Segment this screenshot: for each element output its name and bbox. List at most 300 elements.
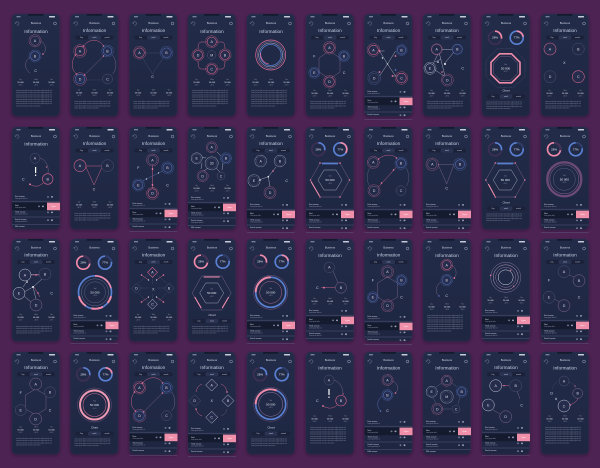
- diamond chart: D: [193, 399, 196, 403]
- concentric ring chart: [490, 262, 521, 292]
- stats: Year: [461, 90, 464, 92]
- list: [247, 314, 295, 344]
- node chart: F: [137, 166, 140, 170]
- tabs: [134, 148, 172, 152]
- list: Fourth season: [309, 332, 320, 335]
- hexagon node chart: C: [343, 71, 346, 75]
- node chart: C: [165, 414, 168, 418]
- stats: Day: [430, 304, 433, 306]
- ring chart: 50 000: [560, 177, 569, 181]
- stats: 50 000: [283, 82, 291, 84]
- phone: row 3 screen 4: [188, 239, 236, 342]
- stats: +30 %: [445, 309, 450, 311]
- title: Information: [494, 253, 518, 258]
- tabs: Day: [139, 262, 142, 264]
- paragraph: Lorem ipsum dolor sit amet consectetur adipiscing elit sed: [16, 439, 52, 442]
- hexagon node chart: D: [34, 417, 37, 421]
- list: Fourth season: [368, 113, 379, 116]
- diamond chart: X: [210, 399, 213, 403]
- tabs: week: [93, 37, 97, 39]
- phone: row 1 screen 10: [541, 14, 589, 117]
- ring chart: [254, 387, 288, 421]
- list: Fourth season: [191, 450, 202, 453]
- hexagon node chart: [15, 378, 55, 425]
- hexagon chart: Total: [210, 288, 214, 290]
- title: Information: [553, 28, 577, 33]
- list: First season: [15, 195, 25, 198]
- stats: Week: [210, 185, 214, 187]
- ring chart: +30 %: [269, 295, 273, 297]
- paragraph: Lorem ipsum dolor sit amet consectetur adipiscing elit sed: [251, 102, 287, 105]
- ring chart: [78, 388, 112, 422]
- list: Fourth season: [132, 449, 144, 452]
- node chart: B: [340, 399, 343, 403]
- paragraph: Lorem ipsum dolor sit amet consectetur adipiscing elit sed: [310, 430, 346, 433]
- node chart: B: [106, 164, 109, 168]
- list: Lorem ipsum dolor sit: [15, 212, 28, 216]
- stats: +30 %: [50, 319, 54, 321]
- list: Open: [404, 326, 408, 328]
- phone: row 1 screen 7: [364, 14, 412, 120]
- tabs: week: [34, 262, 38, 264]
- stats: Day: [19, 314, 22, 316]
- list: First season: [74, 314, 83, 317]
- node chart: [544, 43, 584, 83]
- stats: +30 %: [34, 84, 39, 86]
- list: First season: [309, 203, 319, 206]
- list: Third season: [191, 212, 201, 214]
- node chart: B: [340, 286, 343, 290]
- stats: 50 000: [327, 93, 334, 95]
- list: [130, 426, 178, 456]
- stats: [311, 416, 350, 423]
- list: Third season: [250, 220, 260, 222]
- stats: 50 000: [577, 93, 585, 95]
- list: First season: [426, 420, 436, 423]
- node chart: A: [259, 159, 262, 163]
- tabs: month: [46, 261, 51, 264]
- stats: +30 %: [313, 303, 317, 305]
- list: Fourth season: [250, 337, 262, 340]
- stats: +30 %: [93, 207, 97, 209]
- network chart: B: [400, 48, 403, 52]
- tabs: week: [269, 433, 273, 435]
- phone: row 2 screen 1: [12, 127, 60, 230]
- list: Third season: [426, 436, 436, 438]
- phone: row 4 screen 4: [188, 352, 236, 456]
- stats: Week: [93, 202, 96, 204]
- stats: 50 000: [311, 93, 319, 95]
- donut 28 percent: 28%: [257, 372, 263, 376]
- paragraph: Lorem ipsum dolor sit amet consectetur adipiscing elit sed: [192, 98, 228, 101]
- diamond chart: A: [210, 383, 213, 387]
- list: Fifth season: [426, 450, 436, 453]
- node chart: B: [577, 47, 580, 51]
- stats: Year: [344, 90, 347, 92]
- network chart: B: [456, 48, 459, 52]
- tabs: week: [152, 262, 156, 264]
- node chart: C: [445, 294, 448, 298]
- stats: Day: [137, 314, 140, 316]
- stats: +30 %: [313, 95, 317, 97]
- paragraph: Lorem ipsum dolor sit amet consectetur: [192, 332, 217, 335]
- list: Lorem ipsum dolor sit: [191, 444, 204, 448]
- paragraph: Lorem ipsum dolor sit amet consectetur adipiscing elit sed: [251, 93, 287, 96]
- paragraph: Lorem ipsum dolor sit amet consectetur adipiscing elit sed: [74, 102, 110, 105]
- phone: row 3 screen 9: [482, 239, 530, 342]
- stats: Year: [520, 297, 523, 299]
- stats: +30 %: [210, 84, 215, 86]
- hexagon node chart: D: [386, 304, 389, 308]
- node chart: C: [210, 67, 213, 71]
- heading: Business: [501, 359, 512, 362]
- node chart: A: [549, 47, 552, 51]
- paragraph: Lorem ipsum dolor sit amet consectetur adipiscing elit sed: [310, 104, 346, 107]
- tabs: month: [516, 207, 521, 210]
- diamond chart: [132, 267, 174, 309]
- stats: 50 000: [224, 188, 232, 190]
- list: [364, 203, 412, 232]
- title: Information: [377, 366, 401, 370]
- node chart: E: [253, 179, 256, 183]
- phone: row 4 screen 6: [306, 352, 354, 455]
- list: First season: [250, 203, 260, 206]
- node chart: [316, 375, 346, 408]
- paragraph: Lorem ipsum dolor sit amet consectetur: [74, 219, 99, 222]
- node chart: B: [165, 51, 168, 55]
- tabs: Day: [491, 96, 495, 98]
- list: First season: [132, 202, 142, 205]
- stats: +30 %: [195, 190, 199, 192]
- paragraph: Lorem ipsum dolor sit amet consectetur adipiscing elit sed: [427, 314, 463, 317]
- hexagon node chart: B: [400, 278, 403, 282]
- node chart: F: [548, 278, 551, 282]
- ring chart: Total: [269, 399, 273, 402]
- stats: Day: [254, 79, 257, 81]
- paragraph: Lorem ipsum dolor sit amet consectetur adipiscing elit sed: [310, 433, 346, 436]
- stats: Year: [344, 298, 347, 300]
- hexagon chart: +30 %: [328, 183, 333, 185]
- phone: row 3 screen 5: [247, 239, 295, 344]
- list: [188, 427, 236, 456]
- title: Information: [553, 252, 577, 258]
- list: Lorem ipsum dolor: [544, 326, 555, 328]
- tabs: [311, 36, 349, 40]
- chart caption: Chart: [267, 426, 275, 430]
- stats: [76, 90, 114, 97]
- stats: Day: [19, 426, 22, 428]
- list: Lorem ipsum dolor sit: [132, 428, 146, 431]
- list: [364, 420, 412, 453]
- paragraph: Lorem ipsum dolor sit amet consectetur: [134, 332, 158, 335]
- list: Lorem ipsum dolor sit: [544, 332, 557, 334]
- paragraph: Lorem ipsum dolor sit amet consectetur: [16, 444, 41, 447]
- stats: 50 000: [135, 317, 142, 319]
- diamond chart: C: [210, 416, 213, 420]
- node chart: C: [106, 77, 109, 81]
- paragraph: Lorem ipsum dolor sit amet consectetur adipiscing elit sed: [545, 437, 581, 440]
- chart caption: Chart: [502, 200, 510, 204]
- phone: row 1 screen 5: [247, 14, 295, 117]
- paragraph: Lorem ipsum dolor sit amet consectetur adipiscing elit sed: [74, 442, 110, 445]
- tabs: week: [445, 37, 449, 39]
- phone: row 2 screen 5: [247, 127, 295, 232]
- list: Open: [51, 206, 56, 208]
- list: Fourth season: [191, 219, 202, 222]
- list: Fifth season: [15, 225, 25, 228]
- tabs: [487, 94, 525, 98]
- stats: 50 000: [48, 430, 56, 432]
- paragraph: Lorem ipsum dolor sit amet consectetur: [427, 107, 452, 110]
- donut 77 percent: 77%: [279, 372, 285, 376]
- network chart: [13, 268, 53, 311]
- phone: row 3 screen 7: [364, 239, 412, 344]
- node chart: [378, 374, 398, 413]
- stats: Year: [285, 79, 288, 81]
- stats: Week: [504, 297, 508, 299]
- list: [364, 90, 412, 120]
- list: Third season: [132, 442, 143, 444]
- tabs: [193, 319, 231, 323]
- title: Information: [435, 253, 459, 258]
- stats: +30 %: [344, 95, 348, 97]
- stats: +30 %: [226, 84, 230, 86]
- stats: +30 %: [210, 190, 215, 192]
- heading: Business: [148, 22, 159, 25]
- tabs: Day: [550, 37, 554, 39]
- list: [70, 314, 118, 344]
- node chart: B: [386, 393, 389, 397]
- list: Lorem ipsum dolor sit: [250, 316, 263, 319]
- network chart: D: [35, 303, 38, 307]
- list: Next: [368, 429, 372, 432]
- paragraph: Lorem ipsum dolor sit amet consectetur adipiscing elit sed: [16, 327, 52, 330]
- paragraph: Lorem ipsum dolor sit amet consectetur adipiscing elit sed: [74, 104, 110, 107]
- node chart: C: [520, 403, 523, 407]
- phone: row 1 screen 6: [306, 14, 354, 117]
- list: Third season: [368, 436, 378, 438]
- tabs: month: [281, 432, 286, 435]
- node chart: B: [445, 278, 448, 282]
- node chart: E: [430, 390, 433, 394]
- stats: 50 000: [48, 82, 56, 84]
- list: First season: [426, 203, 436, 206]
- stats: 50 000: [546, 418, 554, 420]
- stats: +30 %: [461, 309, 465, 311]
- node chart: A: [494, 384, 497, 388]
- list: First season: [250, 314, 260, 317]
- list: First season: [485, 309, 495, 312]
- stats: +30 %: [269, 84, 274, 86]
- list: First season: [368, 420, 377, 423]
- list: Lorem ipsum dolor sit: [485, 334, 498, 337]
- node chart: A: [79, 49, 82, 53]
- list: Third season: [191, 444, 201, 446]
- paragraph: Lorem ipsum dolor sit amet consectetur adipiscing elit sed: [545, 428, 581, 431]
- list: Fourth season: [544, 226, 556, 229]
- tabs: month: [164, 149, 168, 152]
- tabs: month: [164, 261, 168, 264]
- paragraph: Lorem ipsum dolor sit amet consectetur adipiscing elit sed: [251, 440, 287, 443]
- donut 28 percent: 28%: [198, 260, 204, 264]
- tabs: Day: [491, 374, 495, 376]
- heading: Business: [266, 135, 277, 138]
- list: Lorem ipsum dolor: [132, 214, 144, 216]
- tabs: month: [281, 149, 286, 152]
- heading: Business: [148, 135, 159, 138]
- donut 77 percent: 77%: [279, 260, 285, 264]
- node chart: D: [549, 75, 552, 79]
- hexagon node chart: [309, 41, 350, 88]
- list: First season: [544, 203, 554, 206]
- hexagon node chart: D: [328, 80, 331, 84]
- list: Lorem ipsum dolor: [191, 439, 202, 441]
- phone: row 3 screen 6: [306, 239, 354, 342]
- list: Next: [368, 99, 372, 102]
- list: Next: [191, 436, 195, 439]
- tabs: Day: [374, 150, 377, 152]
- network chart: D: [373, 76, 376, 80]
- list: First season: [368, 203, 377, 206]
- list: Lorem ipsum dolor: [485, 438, 496, 440]
- stats: 50 000: [107, 92, 114, 94]
- stats: +30 %: [548, 421, 552, 423]
- tabs: month: [105, 36, 109, 39]
- stats: +30 %: [195, 84, 199, 86]
- stats: Week: [34, 79, 38, 81]
- list: [130, 202, 178, 232]
- stats: Year: [579, 90, 582, 92]
- stats: [17, 426, 56, 434]
- paragraph: Lorem ipsum dolor sit amet consectetur adipiscing elit sed: [310, 439, 346, 442]
- title: Information: [435, 141, 459, 146]
- tabs: month: [575, 36, 580, 39]
- tabs: week: [387, 262, 391, 264]
- node chart: [426, 158, 466, 191]
- donut 28 percent: 28%: [492, 147, 498, 151]
- tabs: Day: [256, 433, 260, 435]
- octagon chart: 50 000: [501, 66, 510, 70]
- phone: row 2 screen 8: [423, 127, 471, 232]
- title: Information: [435, 366, 459, 370]
- paragraph: Lorem ipsum dolor sit amet consectetur adipiscing elit sed: [486, 100, 522, 104]
- tabs: Day: [139, 37, 142, 39]
- paragraph: Lorem ipsum dolor sit amet consectetur: [16, 332, 41, 335]
- heading: Business: [89, 22, 100, 25]
- hexagon node chart: A: [328, 46, 331, 50]
- title: Information: [24, 29, 48, 34]
- stats: 50 000: [342, 418, 350, 420]
- stats: 50 000: [209, 188, 216, 190]
- paragraph: Lorem ipsum dolor sit amet consectetur adipiscing elit sed: [16, 98, 52, 101]
- list: Lorem ipsum dolor sit: [368, 317, 381, 320]
- stats: 50 000: [342, 301, 350, 303]
- phone: row 2 screen 9: [482, 127, 530, 230]
- tabs: Day: [432, 37, 436, 39]
- list: Lorem ipsum dolor sit: [191, 429, 204, 432]
- stats: +30 %: [93, 95, 97, 97]
- list: Lorem ipsum dolor sit: [485, 444, 498, 446]
- tabs: [134, 36, 172, 40]
- node chart: C: [445, 187, 448, 191]
- stats: Year: [168, 90, 171, 92]
- paragraph: Lorem ipsum dolor sit amet consectetur: [310, 107, 335, 110]
- node chart: [436, 259, 456, 298]
- list: First season: [544, 314, 554, 317]
- phone: row 1 screen 2: [70, 14, 118, 117]
- title: Information: [24, 142, 48, 146]
- list: Lorem ipsum dolor sit: [309, 205, 322, 208]
- tabs: Day: [139, 374, 142, 376]
- tabs: [134, 372, 172, 376]
- heading: Business: [383, 246, 394, 250]
- diamond chart: B: [227, 399, 230, 403]
- list: Lorem ipsum dolor sit: [250, 332, 263, 334]
- heading: Business: [325, 246, 336, 250]
- stats: 50 000: [428, 306, 436, 308]
- node chart: [26, 35, 45, 73]
- paragraph: Lorem ipsum dolor sit amet consectetur adipiscing elit sed: [545, 426, 581, 429]
- donut 77 percent: 77%: [103, 372, 109, 376]
- tabs: Day: [374, 262, 377, 264]
- list: Third season: [544, 220, 554, 222]
- list: Lorem ipsum dolor sit: [250, 220, 263, 224]
- donut 28 percent: 28%: [551, 147, 557, 151]
- node chart: B: [34, 54, 37, 58]
- list: Lorem ipsum dolor sit: [485, 326, 498, 330]
- hexagon node chart: F: [20, 391, 23, 395]
- ring chart: Total: [563, 174, 566, 177]
- stats: 50 000: [562, 418, 569, 420]
- hexagon chart: [485, 162, 526, 198]
- stats: +30 %: [152, 95, 156, 97]
- list: Lorem ipsum dolor sit: [74, 316, 87, 319]
- hexagon chart: Total: [329, 174, 332, 178]
- title: Information: [377, 28, 401, 33]
- stats: 50 000: [459, 306, 467, 308]
- list: Open: [521, 320, 526, 322]
- list: Next: [485, 435, 489, 438]
- stats: 50 000: [444, 93, 451, 95]
- list: Next: [368, 324, 372, 327]
- stats: +30 %: [328, 95, 333, 97]
- paragraph: Lorem ipsum dolor sit amet consectetur adipiscing elit sed: [486, 215, 522, 218]
- list: Fourth season: [544, 337, 556, 340]
- node chart: A: [151, 158, 154, 162]
- phone: row 1 screen 1: [12, 14, 60, 117]
- list: Third season: [15, 212, 25, 214]
- ring chart: [254, 275, 288, 309]
- paragraph: Lorem ipsum dolor sit amet consectetur adipiscing elit sed: [545, 430, 581, 433]
- node chart: A: [445, 263, 448, 267]
- paragraph: Lorem ipsum dolor sit amet consectetur adipiscing elit sed: [251, 96, 287, 99]
- stats: 50 000: [91, 204, 99, 206]
- paragraph: Lorem ipsum dolor sit amet consectetur adipiscing elit sed: [16, 93, 52, 96]
- node chart: [550, 376, 583, 412]
- node chart: B: [166, 166, 169, 170]
- tabs: [76, 148, 114, 152]
- list: Open: [404, 101, 408, 103]
- ring chart: +30 %: [269, 407, 273, 409]
- list: Lorem ipsum dolor: [368, 102, 379, 104]
- hexagon chart: +30 %: [210, 296, 214, 298]
- paragraph: Lorem ipsum dolor sit amet consectetur adipiscing elit sed: [545, 439, 581, 442]
- tabs: [134, 260, 172, 264]
- node chart: C: [22, 177, 25, 181]
- title: Information: [24, 252, 48, 258]
- node chart: A: [34, 157, 37, 161]
- network chart: B: [44, 272, 47, 276]
